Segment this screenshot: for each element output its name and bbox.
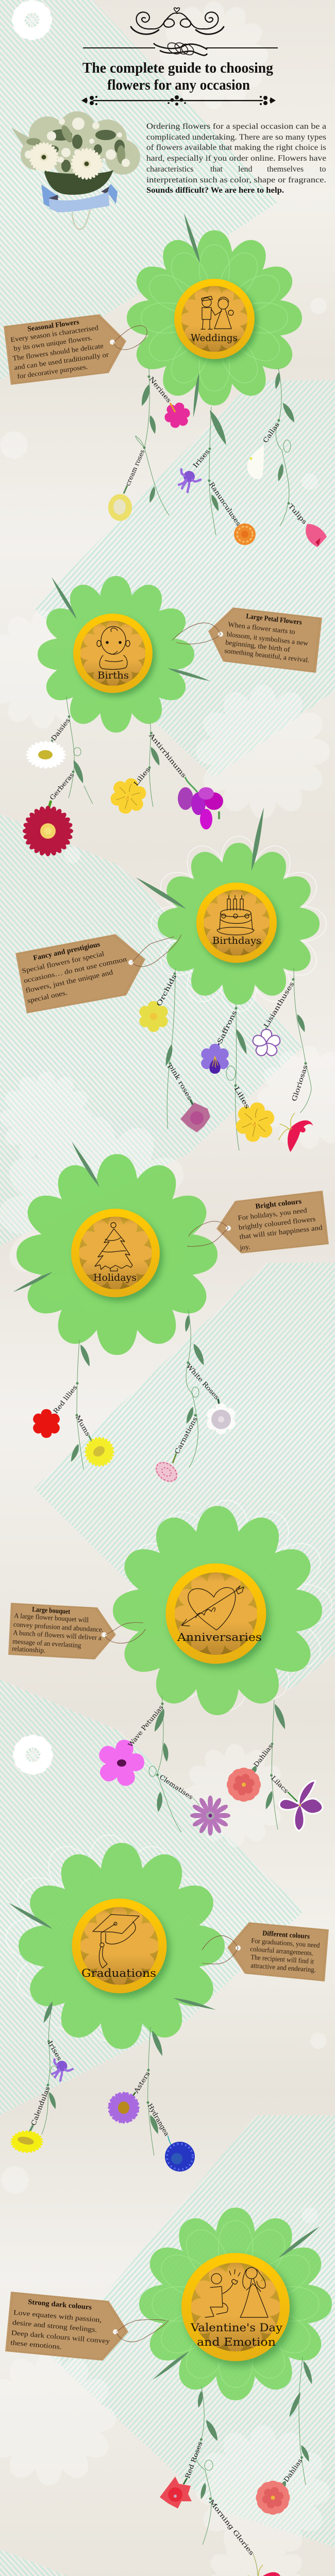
flower: cream roses <box>108 485 132 521</box>
ornament: top flourish <box>131 8 224 34</box>
flower: Wave Petunias <box>90 1734 151 1793</box>
flower: Asters <box>98 2082 149 2133</box>
big flower: Births <box>38 576 211 733</box>
vines: Anniversaries <box>149 1696 288 1832</box>
vines: Holidays <box>69 1310 207 1469</box>
intro paragraph: hard, especially if you order online. Flowers have <box>146 154 326 163</box>
icon: Christmas tree <box>95 1223 132 1271</box>
tag: Large bouquet: convey profusion and abundance. <box>13 1620 104 1634</box>
flower: Hydrangea <box>165 2136 195 2172</box>
intro paragraph: that <box>210 165 223 174</box>
label: Holidays: Holidays <box>93 1272 137 1283</box>
tag: Seasonal Flowers: for decorative purposes. <box>16 363 88 380</box>
label: Red lilies: Red lilies <box>52 1383 78 1415</box>
flower: Daisies <box>13 732 78 777</box>
label: Valentine's Day and Emotion: Valentine's Day <box>190 2321 282 2334</box>
icon: bride and groom <box>201 296 233 329</box>
label: Gerberas: Gerberas <box>48 771 75 802</box>
bouquet ribbon <box>41 184 118 212</box>
icon: proposal <box>205 2267 268 2317</box>
tag: Seasonal Flowers: Every season is characterised <box>10 324 99 344</box>
flower: Lilies <box>105 774 152 818</box>
intro paragraph: themselves <box>267 165 304 174</box>
tag: Different colours: For graduations, you need <box>251 1937 320 1949</box>
panel: Weddings <box>4 213 327 547</box>
tag: Seasonal Flowers: The flowers should be delicate <box>12 342 104 362</box>
panel: Anniversaries <box>8 1500 332 1842</box>
label: Tulips: Tulips <box>287 502 309 526</box>
icon: baby <box>97 626 130 669</box>
flower: Orchids <box>137 1001 170 1032</box>
label: Wave Petunias: Wave Petunias <box>126 1703 165 1749</box>
divider: fleur rule <box>81 95 276 106</box>
tag: Different colours <box>202 1922 329 1981</box>
tag: Large Petal Flowers: beginning, the birth of <box>225 638 291 653</box>
tag: Strong dark colours <box>5 2292 169 2361</box>
label: Valentine's Day and Emotion <box>190 2321 282 2348</box>
label: cream roses: cream roses <box>124 448 146 487</box>
intro paragraph: to <box>320 165 326 174</box>
tag: Fancy and prestigious: occasions… do not use common <box>23 955 127 985</box>
tag: Fancy and prestigious: special ones. <box>27 989 68 1005</box>
flower: Ranunculuses <box>234 523 256 545</box>
label: Lilacs: Lilacs <box>270 1774 290 1794</box>
big flower: Birthdays <box>135 807 326 1011</box>
big flower: Holidays <box>12 1141 217 1355</box>
intro paragraph: characteristics <box>146 165 194 174</box>
big flower: Anniversaries <box>113 1500 332 1715</box>
flower: Nerines <box>161 399 194 431</box>
label: Graduations: Graduations <box>81 1967 156 1979</box>
big flower: Valentine's Day <box>139 2208 332 2400</box>
tag: Large bouquet: relationship. <box>12 1645 46 1654</box>
tag: Fancy and prestigious: Fancy and prestigious <box>32 941 101 962</box>
panel: Valentine's Day and Emotion <box>5 2208 332 2576</box>
label: Irises: Irises <box>191 448 211 469</box>
label: Anniversaries: Anniversaries <box>177 1631 262 1643</box>
icon: birthday cake <box>217 895 254 935</box>
label: Weddings: Weddings <box>191 332 238 344</box>
tag: Fancy and prestigious <box>15 934 181 1013</box>
label: Birthdays: Birthdays <box>212 935 261 946</box>
flower: Red Roses <box>160 2477 192 2509</box>
label: Orchids: Orchids <box>155 973 178 1007</box>
label: pink roses: pink roses <box>167 1062 194 1101</box>
vines: Valentine's Day <box>196 2357 314 2545</box>
flower: Clematises <box>184 1789 237 1842</box>
flower: Antirrhinums <box>178 777 223 829</box>
intro paragraph: interpretation such as color, shape or fragrance. <box>146 176 326 184</box>
tag: Fancy and prestigious: Special flowers for special <box>21 950 105 975</box>
flower: Lisianthuses <box>252 1027 281 1058</box>
intro paragraph: Sounds difficult? We are here to help. <box>146 186 284 195</box>
label: Valentine's Day and Emotion: and Emotion <box>197 2336 276 2348</box>
label: Saffrons: Saffrons <box>215 1009 238 1045</box>
tag: Bright colours: Bright colours <box>255 1198 302 1211</box>
label: Red Roses: Red Roses <box>183 2441 204 2480</box>
tag: Seasonal Flowers <box>4 314 147 385</box>
label: Dahlias: Dahlias <box>282 2457 304 2483</box>
tag: Large Petal Flowers <box>172 607 322 673</box>
flower: White Roses <box>205 1399 238 1434</box>
flower: Irises <box>52 2059 73 2081</box>
flower: Callas <box>247 445 264 479</box>
label: Gloriosas: Gloriosas <box>290 1064 309 1102</box>
tag: Seasonal Flowers: by its own unique flowers. <box>13 334 93 352</box>
title: The complete guide to choosing <box>82 60 273 76</box>
intro paragraph: complicated undertaking. There are so many types <box>146 133 326 142</box>
flower: Red lilies <box>31 1409 61 1438</box>
vines: Birthdays <box>164 968 311 1150</box>
tag: Large bouquet: A bunch of flowers will deliver a <box>13 1629 102 1641</box>
tag: Bright colours: that will stir happiness and <box>239 1224 323 1241</box>
flower: Mums <box>75 1428 124 1476</box>
tag: Strong dark colours: Deep dark colours will convey <box>11 2329 110 2345</box>
title: flowers for any occasion <box>107 77 250 93</box>
label: Mums: Mums <box>74 1414 92 1437</box>
flower: Gerberas <box>7 790 89 872</box>
tag: Seasonal Flowers: and can be used traditionally or <box>13 350 109 371</box>
label: Asters: Asters <box>132 2070 152 2095</box>
flower: Saffrons <box>199 1043 231 1074</box>
intro paragraph: of flowers available that making the right choice is <box>146 143 326 152</box>
tag: Strong dark colours: Strong dark colours <box>28 2298 92 2312</box>
title <box>82 60 273 93</box>
tag: Strong dark colours: desire and strong feelings. <box>12 2318 97 2333</box>
tag: Strong dark colours: Love equates with passion, <box>13 2309 102 2324</box>
tag: Large Petal Flowers: Large Petal Flowers <box>246 613 303 626</box>
label: Lilies: Lilies <box>233 1085 252 1110</box>
flower: Gloriosas <box>278 1113 313 1152</box>
label: Carnations: Carnations <box>173 1416 199 1455</box>
icon: heart and arrow <box>181 1586 244 1630</box>
label: Lilies: Lilies <box>132 766 152 787</box>
tag: Seasonal Flowers: Seasonal Flowers <box>27 318 80 333</box>
tag: Different colours: colourful arrangements. <box>250 1945 314 1957</box>
flower: Lilacs <box>280 1782 322 1830</box>
tag: Large Petal Flowers: blossom, it symbolises a new <box>226 630 309 647</box>
label: Irises: Irises <box>46 2039 64 2062</box>
tag: Strong dark colours: these emotions. <box>10 2338 62 2351</box>
panel: Holidays <box>12 1141 329 1486</box>
flower: Calendulas <box>1 2123 53 2160</box>
label: Callas: Callas <box>261 421 281 444</box>
big flower: Weddings <box>127 213 302 418</box>
label: Hydrangea: Hydrangea <box>146 2102 171 2138</box>
tag: Large bouquet: Large bouquet <box>32 1606 71 1616</box>
vines: Weddings <box>136 368 297 535</box>
label: Nerines: Nerines <box>147 375 173 404</box>
icon: graduation cap <box>93 1914 139 1968</box>
label: Lisianthuses: Lisianthuses <box>262 980 295 1029</box>
intro paragraph <box>146 122 326 195</box>
flower: Morning Glories <box>246 2554 281 2576</box>
label: Daisies: Daisies <box>49 717 72 742</box>
tag: Different colours: Different colours <box>262 1930 310 1941</box>
tag: Large Petal Flowers: something beautiful, a revival. <box>224 647 310 664</box>
tag: Large bouquet: message of an everlasting <box>12 1637 81 1649</box>
striped white daisies <box>4 0 61 1783</box>
flower: Tulips <box>306 524 327 547</box>
label: Antirrhinums: Antirrhinums <box>147 731 188 779</box>
bouquet photo <box>11 111 140 229</box>
flower: Lilies <box>231 1099 279 1145</box>
label: Ranunculuses: Ranunculuses <box>208 481 243 527</box>
tag: Large bouquet <box>8 1603 145 1659</box>
panel: Graduations <box>1 1835 329 2172</box>
label: White Roses: White Roses <box>185 1362 221 1401</box>
tag: Bright colours: joy. <box>239 1243 250 1251</box>
label: Dahlias: Dahlias <box>252 1742 274 1768</box>
tag: Large bouquet: A large flower bouquet will <box>14 1612 89 1624</box>
label: Clematises: Clematises <box>158 1773 194 1801</box>
vines: Births <box>66 697 162 807</box>
tag: Bright colours: brightly coloured flowers <box>238 1215 316 1231</box>
label: Births: Births <box>97 670 129 681</box>
flower: Dahlias <box>220 1761 268 1808</box>
flower: Dahlias <box>249 2474 297 2521</box>
intro paragraph: Ordering flowers for a special occasion can be a <box>146 122 326 131</box>
flower: Carnations <box>152 1453 181 1486</box>
tag: Large Petal Flowers: When a flower starts to <box>228 620 296 636</box>
big flower: Graduations <box>6 1835 225 2049</box>
vines: Graduations <box>42 2001 165 2156</box>
label: Morning Glories: Morning Glories <box>208 2498 256 2556</box>
tag: Fancy and prestigious: flowers, just the unique and <box>25 968 114 994</box>
label: Calendulas: Calendulas <box>29 2086 52 2127</box>
divider: rule with knot <box>83 41 278 57</box>
panel: Births <box>7 576 322 872</box>
tag: Different colours: attractive and endearing. <box>250 1961 316 1974</box>
tag: Different colours: The recipient will find it <box>250 1953 314 1965</box>
flower: pink roses <box>180 1099 210 1132</box>
tag: Bright colours: For holidays, you need <box>238 1206 308 1222</box>
intro paragraph: lend <box>238 165 253 174</box>
panel: Birthdays <box>15 807 326 1152</box>
tag: Bright colours <box>187 1191 329 1253</box>
flower: Irises <box>179 469 200 492</box>
